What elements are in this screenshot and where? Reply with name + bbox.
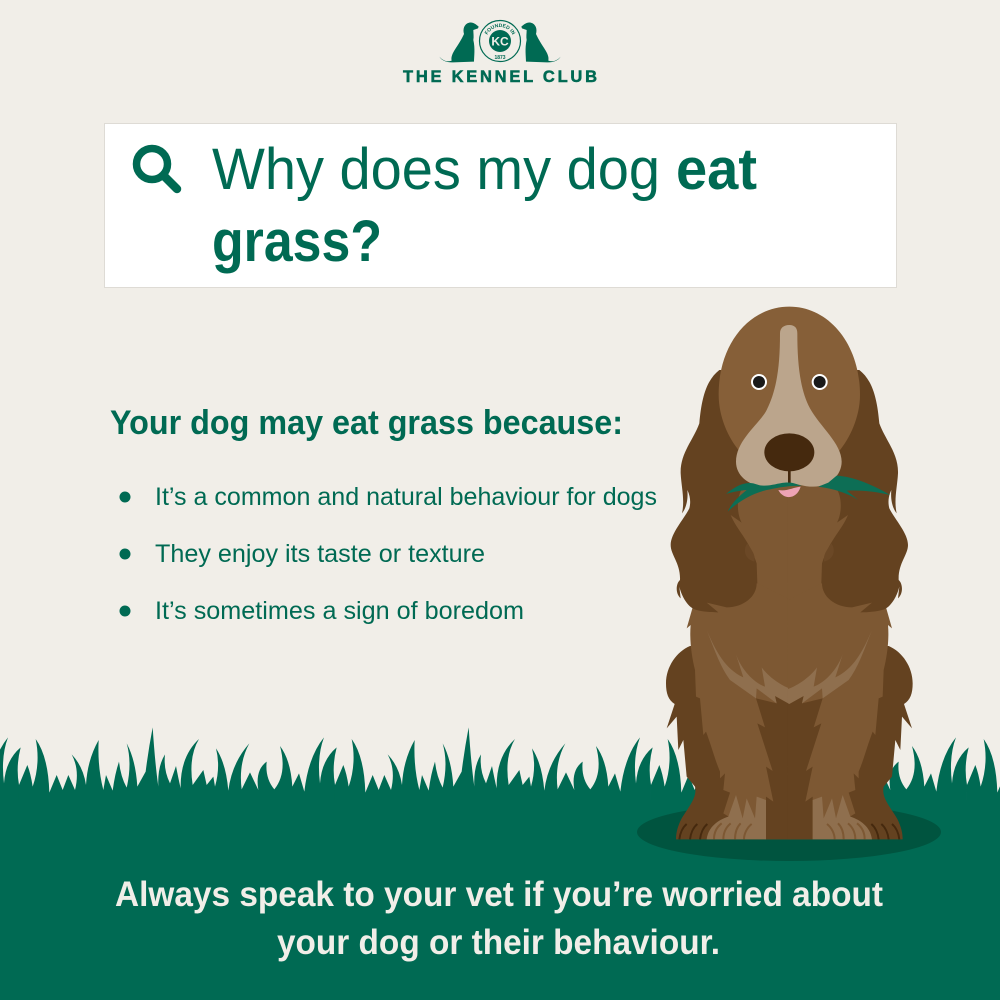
bullet 3: It’s sometimes a sign of boredom bbox=[155, 597, 524, 625]
footer message bbox=[115, 875, 883, 962]
logo roundel bbox=[478, 20, 522, 62]
search box bbox=[104, 124, 896, 288]
logo wordmark: THE KENNEL CLUB bbox=[403, 68, 597, 86]
search title: eat bbox=[676, 137, 757, 202]
bullet 2: They enjoy its taste or texture bbox=[155, 540, 485, 568]
footer message: your dog or their behaviour. bbox=[277, 923, 720, 962]
dog head bbox=[671, 307, 908, 612]
dog lower body bbox=[666, 550, 913, 839]
bullet list bbox=[120, 483, 657, 625]
grass and ground bbox=[0, 727, 1000, 1000]
logo roundel: FOUNDED IN bbox=[484, 24, 516, 35]
heading: reasons: Your dog may eat grass because: bbox=[110, 404, 623, 442]
search title bbox=[212, 137, 757, 274]
logo: The Kennel Club bbox=[402, 20, 597, 86]
illustration: spaniel with grass bbox=[666, 307, 913, 839]
logo roundel: 1873 bbox=[494, 55, 506, 61]
search title: grass? bbox=[212, 209, 382, 274]
dog shadow bbox=[637, 803, 941, 861]
logo roundel: KC bbox=[491, 34, 509, 48]
icon: magnifying glass bbox=[136, 148, 177, 189]
footer message: Always speak to your vet if you’re worried about bbox=[115, 875, 883, 914]
logo dogs bbox=[439, 23, 561, 62]
search title: Why does my dog bbox=[212, 137, 660, 202]
bullet 1: It’s a common and natural behaviour for dogs bbox=[155, 483, 657, 511]
